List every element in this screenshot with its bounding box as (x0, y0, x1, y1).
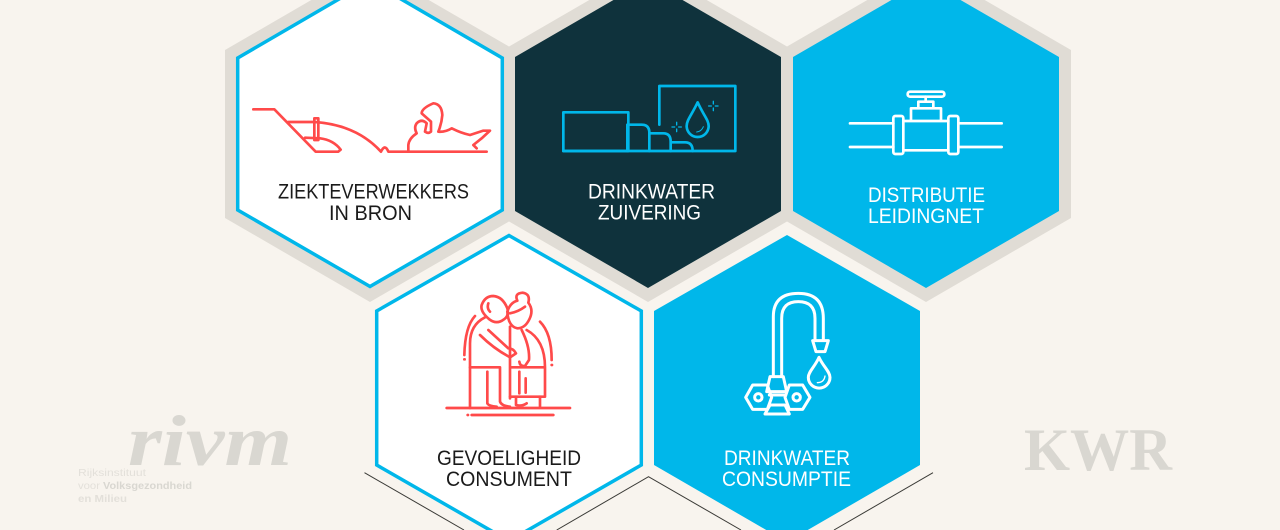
tagline: Volksgezondheid (103, 480, 192, 492)
tagline: Rijksinstituut (78, 467, 146, 479)
label: GEVOELIGHEID (437, 447, 581, 470)
hexagon (377, 236, 641, 530)
tagline: en Milieu (78, 493, 127, 505)
label: DRINKWATER (724, 447, 850, 470)
panel: distributie leidingnet (793, 0, 1059, 288)
label: DRINKWATER (588, 180, 715, 204)
label: DISTRIBUTIE (868, 184, 985, 207)
logo: rivm (78, 401, 292, 505)
hexagon (238, 0, 502, 286)
hexagon (654, 235, 920, 530)
icon: plough and swan (253, 103, 490, 152)
label: LEIDINGNET (868, 205, 984, 228)
tagline: voor (78, 480, 101, 492)
label: IN BRON (329, 202, 412, 225)
panel: gevoeligheid consument (377, 236, 641, 530)
label: ZIEKTEVERWEKKERS (278, 180, 469, 204)
label: CONSUMENT (446, 468, 572, 491)
icon: treatment basins with drop (563, 86, 735, 151)
panel: ziekteverwekkers in bron (238, 0, 502, 286)
panel: drinkwater consumptie (654, 235, 920, 530)
hexagon (515, 0, 781, 288)
panel: drinkwater zuivering (515, 0, 781, 288)
label: ZUIVERING (598, 202, 701, 224)
logo: KWR: KWR (1024, 417, 1173, 483)
wordmark: rivm (128, 401, 292, 481)
icon: elderly couple (447, 293, 570, 415)
hexagon (793, 0, 1059, 288)
label: CONSUMPTIE (722, 468, 851, 491)
icon: tap with drop (746, 293, 830, 414)
grey hexagon backing (225, 0, 1071, 302)
icon: pipe with valve (850, 92, 1002, 154)
